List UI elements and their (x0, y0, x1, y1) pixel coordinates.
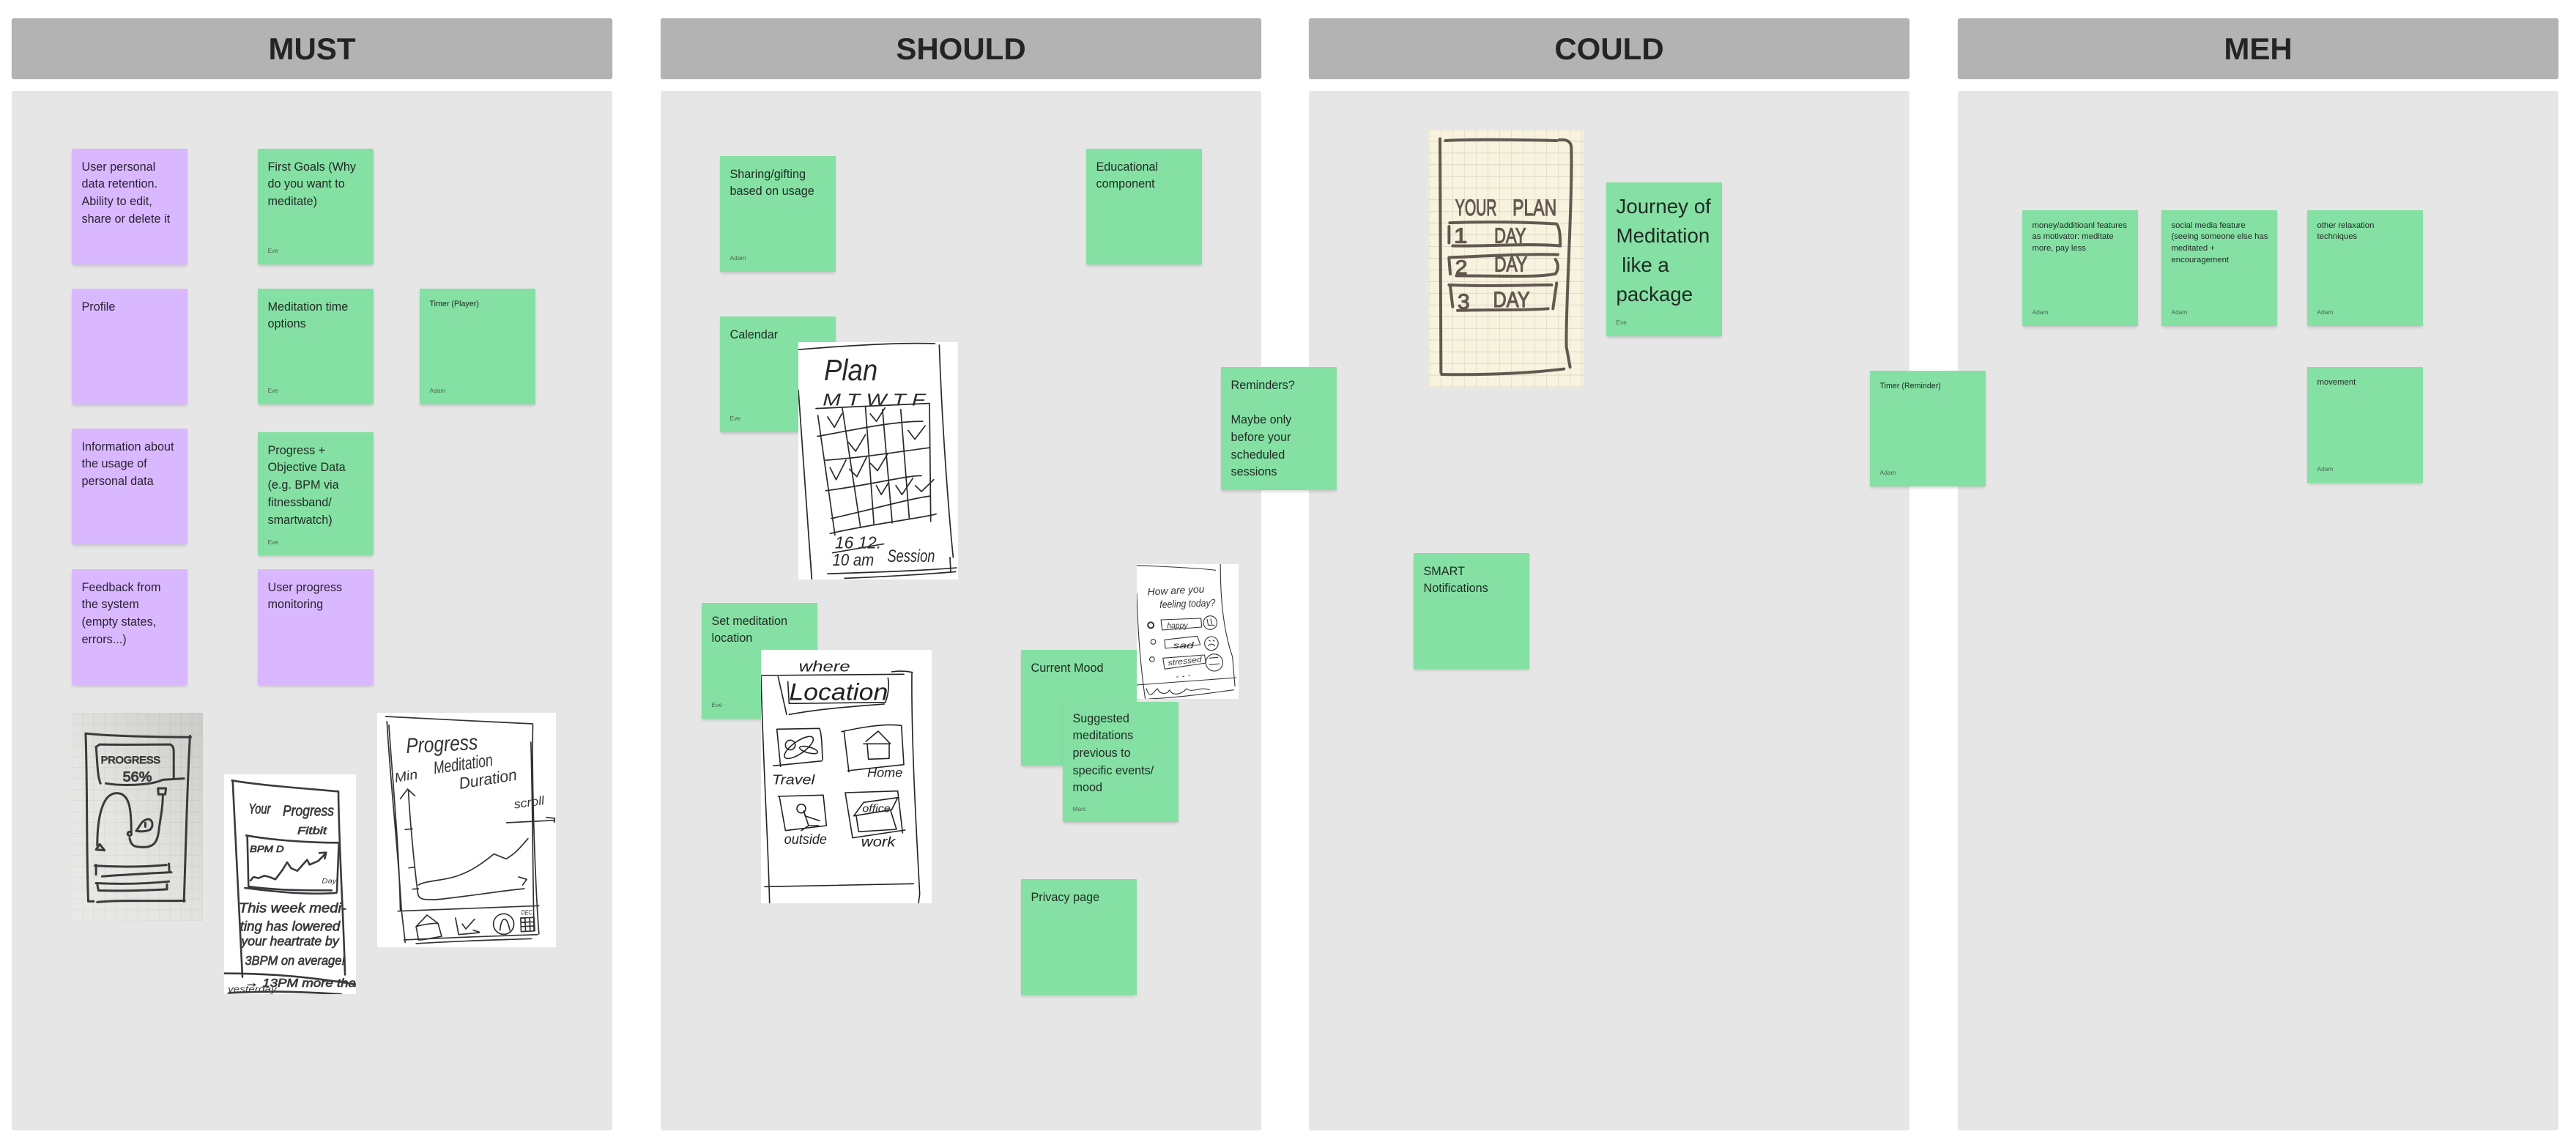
heading: MUST (12, 18, 612, 79)
sticky: timer reminder spanning could and meh (1870, 371, 1986, 486)
sticky: social media feature (2161, 210, 2277, 326)
sticky: feedback from the system (72, 569, 188, 685)
sticky: social media feature: social media feature (seeing someone else has meditated + encouragement (2171, 221, 2268, 264)
sketch: progress meditation duration line chart: DEC (521, 908, 532, 916)
sketch: progress meditation duration line chart: Min (393, 767, 419, 785)
sticky: other relaxation techniques (2307, 210, 2423, 326)
panel: must column (12, 91, 612, 1130)
sketch: how are you feeling today: happy (1167, 621, 1189, 630)
sticky: information about personal data: Information about the usage of personal data (82, 440, 174, 488)
sticky: first goals: Eve (268, 247, 278, 254)
sticky: sharing and gifting (720, 156, 836, 272)
sketch: how are you feeling today: sad (1173, 640, 1194, 651)
sketch: plan calendar with checkmarks (798, 342, 958, 579)
sketch: your progress with fitbit BPM chart: yesterday (227, 983, 278, 994)
sketch: plan calendar with checkmarks: M T W T F (823, 391, 927, 410)
sketch: where location picker: where (799, 658, 850, 675)
sketch: how are you feeling today: feeling today? (1159, 596, 1216, 610)
sticky: journey of meditation (1606, 182, 1722, 336)
sticky: money additional features (2022, 210, 2138, 326)
sticky: other relaxation techniques: other relaxation techniques (2317, 221, 2374, 241)
sticky: progress and objective data: Progress + Objective Data (e.g. BPM via fitnessband/ smartwatch) (268, 444, 346, 526)
sketch: where location picker: Home (867, 765, 902, 779)
sticky: user personal data retention (72, 149, 188, 264)
sketch: progress 56% on grid paper: PROGRESS (101, 754, 160, 766)
sticky: money additional features: money/additioanl features as motivator: meditate more, pay less (2032, 221, 2127, 253)
heading: MUST: MUST (268, 32, 356, 66)
sticky: current mood (1021, 650, 1137, 766)
sticky: meditation time options: Eve (268, 387, 278, 394)
sticky: smart notifications: SMART Notifications (1424, 565, 1488, 595)
sketch: your progress with fitbit BPM chart: ting has lowered (240, 918, 341, 933)
sketch: progress meditation duration line chart: scroll (513, 793, 546, 812)
sketch: your progress with fitbit BPM chart (224, 774, 356, 994)
sticky: first goals (258, 149, 374, 264)
panel: meh column (1958, 91, 2558, 1130)
sketch: your progress with fitbit BPM chart: Your (248, 801, 272, 817)
sticky: set meditation location: Set meditation location (712, 615, 787, 645)
sticky: timer player: Timer (Player) (429, 300, 479, 308)
sketch: your plan on yellow grid paper: DAY (1494, 253, 1527, 277)
sticky: journey of meditation: Journey of Meditation like a package (1616, 195, 1711, 305)
sticky: privacy page: Privacy page (1031, 891, 1099, 904)
sticky: movement: Adam (2317, 465, 2333, 473)
sticky: money additional features: Adam (2032, 308, 2048, 316)
sticky: suggested meditations: Marc (1072, 804, 1086, 812)
sticky: educational component (1086, 149, 1202, 264)
sticky: user personal data retention: User personal data retention. Ability to edit, share or delete it (82, 160, 170, 226)
sticky: timer reminder spanning could and meh: Timer (Reminder) (1879, 382, 1941, 390)
sticky: educational component: Educational component (1096, 160, 1158, 190)
sketch: your plan on yellow grid paper: 1 (1454, 225, 1467, 248)
sketch: your plan on yellow grid paper: DAY (1494, 225, 1526, 248)
heading: MEH: MEH (2224, 32, 2293, 66)
sketch: progress 56% on grid paper: 56% (123, 769, 152, 785)
sticky: user progress monitoring: User progress monitoring (268, 581, 342, 611)
sticky: movement: movement (2317, 378, 2356, 387)
sticky: calendar (720, 316, 836, 432)
heading: SHOULD: SHOULD (896, 32, 1026, 66)
sticky: timer player: Adam (429, 387, 445, 394)
sketch: plan calendar with checkmarks: 16 12. (835, 534, 881, 552)
sketch: how are you feeling today: How are you (1147, 583, 1205, 598)
sketch: your plan on yellow grid paper (1428, 130, 1584, 388)
sticky: current mood: Current Mood (1031, 662, 1103, 675)
sketch: plan calendar with checkmarks: Session (887, 546, 935, 566)
sketch: your plan on yellow grid paper: YOUR (1455, 194, 1496, 221)
sketch: your plan on yellow grid paper: 3 (1458, 291, 1470, 314)
sticky: timer reminder spanning could and meh: Adam (1879, 469, 1896, 476)
sticky: profile: Profile (82, 300, 115, 314)
sticky: progress and objective data (258, 432, 374, 555)
sketch: your progress with fitbit BPM chart: BPM D (250, 844, 284, 854)
panel: should column (661, 91, 1261, 1130)
sticky: set meditation location (702, 603, 817, 719)
sticky: privacy page (1021, 879, 1137, 995)
sketch: your progress with fitbit BPM chart: Fitbit (297, 825, 327, 837)
sticky: other relaxation techniques: Adam (2317, 308, 2333, 316)
heading: SHOULD (661, 18, 1261, 79)
sketch: your plan on yellow grid paper: PLAN (1512, 194, 1556, 221)
sticky: progress and objective data: Eve (268, 538, 278, 545)
sticky: calendar: Eve (730, 415, 740, 422)
sketch: how are you feeling today (1137, 564, 1239, 699)
sketch: where location picker: Location (789, 678, 888, 705)
sticky: set meditation location: Eve (712, 701, 722, 708)
sketch: where location picker: work (861, 834, 897, 850)
sticky: reminders spanning should and could: Reminders? Maybe only before your scheduled sessions (1231, 379, 1295, 478)
sketch: where location picker: office (862, 804, 891, 815)
sketch: your plan on yellow grid paper: DAY (1493, 288, 1530, 312)
sketch: where location picker: Travel (772, 771, 815, 787)
sticky: profile (72, 289, 188, 404)
heading: COULD: COULD (1554, 32, 1664, 66)
panel: could column (1309, 91, 1909, 1130)
sketch: your progress with fitbit BPM chart: 3BPM on average! (245, 953, 345, 968)
sketch: plan calendar with checkmarks: 10 am (833, 552, 874, 570)
sticky: suggested meditations: Suggested meditations previous to specific events/ mood (1072, 712, 1154, 794)
sketch: progress meditation duration line chart: Progress (406, 731, 478, 758)
sticky: information about personal data (72, 429, 188, 544)
sticky: first goals: First Goals (Why do you want to meditate) (268, 160, 356, 208)
sketch: your progress with fitbit BPM chart: Day (322, 877, 338, 884)
sticky: sharing and gifting: Sharing/gifting based on usage (730, 168, 814, 198)
sketch: plan calendar with checkmarks: Plan (824, 353, 877, 387)
sketch: progress meditation duration line chart (377, 713, 556, 947)
sketch: progress 56% on grid paper (72, 713, 203, 921)
sketch: your progress with fitbit BPM chart: This week medi- (239, 900, 346, 915)
sticky: meditation time options: Meditation time options (268, 300, 348, 330)
sticky: smart notifications (1414, 553, 1529, 669)
sketch: where location picker (761, 650, 932, 903)
sketch: your plan on yellow grid paper: 2 (1455, 256, 1467, 278)
sticky: sharing and gifting: Adam (730, 254, 746, 262)
sketch: progress meditation duration line chart: Duration (458, 766, 518, 793)
sketch: your progress with fitbit BPM chart: your heartrate by (240, 933, 340, 948)
sticky: suggested meditations (1063, 702, 1178, 822)
heading: MEH (1958, 18, 2558, 79)
heading: COULD (1309, 18, 1909, 79)
sticky: user progress monitoring (258, 569, 374, 685)
sketch: where location picker: outside (784, 832, 827, 848)
sticky: meditation time options (258, 289, 374, 404)
sticky: movement (2307, 367, 2423, 483)
sketch: how are you feeling today: stressed (1168, 655, 1203, 667)
sticky: reminders spanning should and could (1221, 367, 1337, 490)
sticky: timer player (420, 289, 535, 404)
sticky: journey of meditation: Eve (1616, 319, 1627, 326)
sketch: your progress with fitbit BPM chart: Progress (283, 803, 334, 820)
sketch: your progress with fitbit BPM chart: → 13PM more tha (245, 977, 356, 990)
sketch: progress meditation duration line chart: Meditation (432, 750, 494, 778)
sticky: calendar: Calendar (730, 328, 778, 341)
sticky: feedback from the system: Feedback from the system (empty states, errors...) (82, 581, 160, 646)
sticky: social media feature: Adam (2171, 308, 2187, 316)
